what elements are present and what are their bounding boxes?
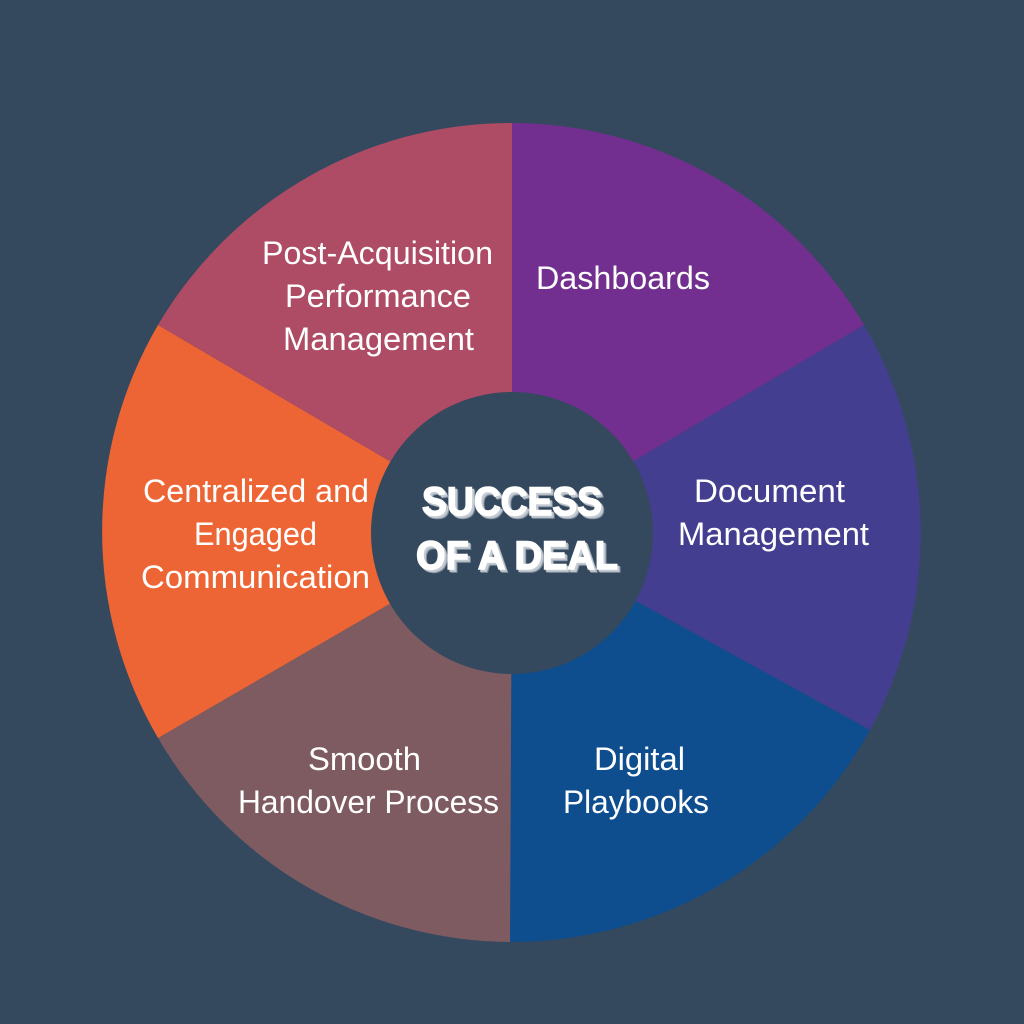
label: Smooth Handover Process: Handover Process	[238, 784, 499, 820]
segment: Document Management	[512, 325, 921, 730]
label: Centralized and Engaged Communication: Centralized and	[143, 473, 369, 509]
label: Digital Playbooks	[563, 741, 709, 820]
center title: Success of a Deal: SUCCESS	[422, 480, 602, 524]
segment: Post-Acquisition Performance Management	[158, 123, 512, 533]
label: Post-Acquisition Performance Management: Performance	[285, 278, 471, 314]
center title: Success of a Deal: SUCCESS	[425, 483, 605, 527]
label: Post-Acquisition Performance Management: Management	[283, 321, 474, 357]
label: Document Management: Document	[694, 473, 845, 509]
center title: Success of a Deal: OF A DEAL	[416, 534, 618, 578]
label: Document Management	[678, 473, 869, 552]
label: Document Management: Management	[678, 516, 869, 552]
center circle	[371, 392, 653, 674]
label: Dashboards: Dashboards	[536, 260, 710, 296]
segment: Smooth Handover Process	[158, 533, 512, 942]
segment: Dashboards	[512, 123, 864, 533]
segment: Digital Playbooks	[510, 533, 870, 942]
center title: Success of a Deal: OF A DEAL	[419, 537, 621, 581]
label: Centralized and Engaged Communication: Communication	[141, 559, 370, 595]
label: Smooth Handover Process: Smooth	[308, 741, 421, 777]
label: Centralized and Engaged Communication	[141, 473, 370, 595]
center title: Success of a Deal	[416, 480, 621, 581]
label: Post-Acquisition Performance Management: Post-Acquisition	[262, 235, 493, 271]
label: Smooth Handover Process	[238, 741, 499, 820]
center title: Success of a Deal: OF A DEAL	[418, 536, 620, 580]
segment: Centralized and Engaged Communication	[102, 325, 512, 738]
label: Centralized and Engaged Communication: Engaged	[194, 516, 317, 552]
label: Post-Acquisition Performance Management	[262, 235, 493, 357]
label: Digital Playbooks: Playbooks	[563, 784, 709, 820]
center title: Success of a Deal: SUCCESS	[424, 482, 604, 526]
label: Digital Playbooks: Digital	[594, 741, 685, 777]
